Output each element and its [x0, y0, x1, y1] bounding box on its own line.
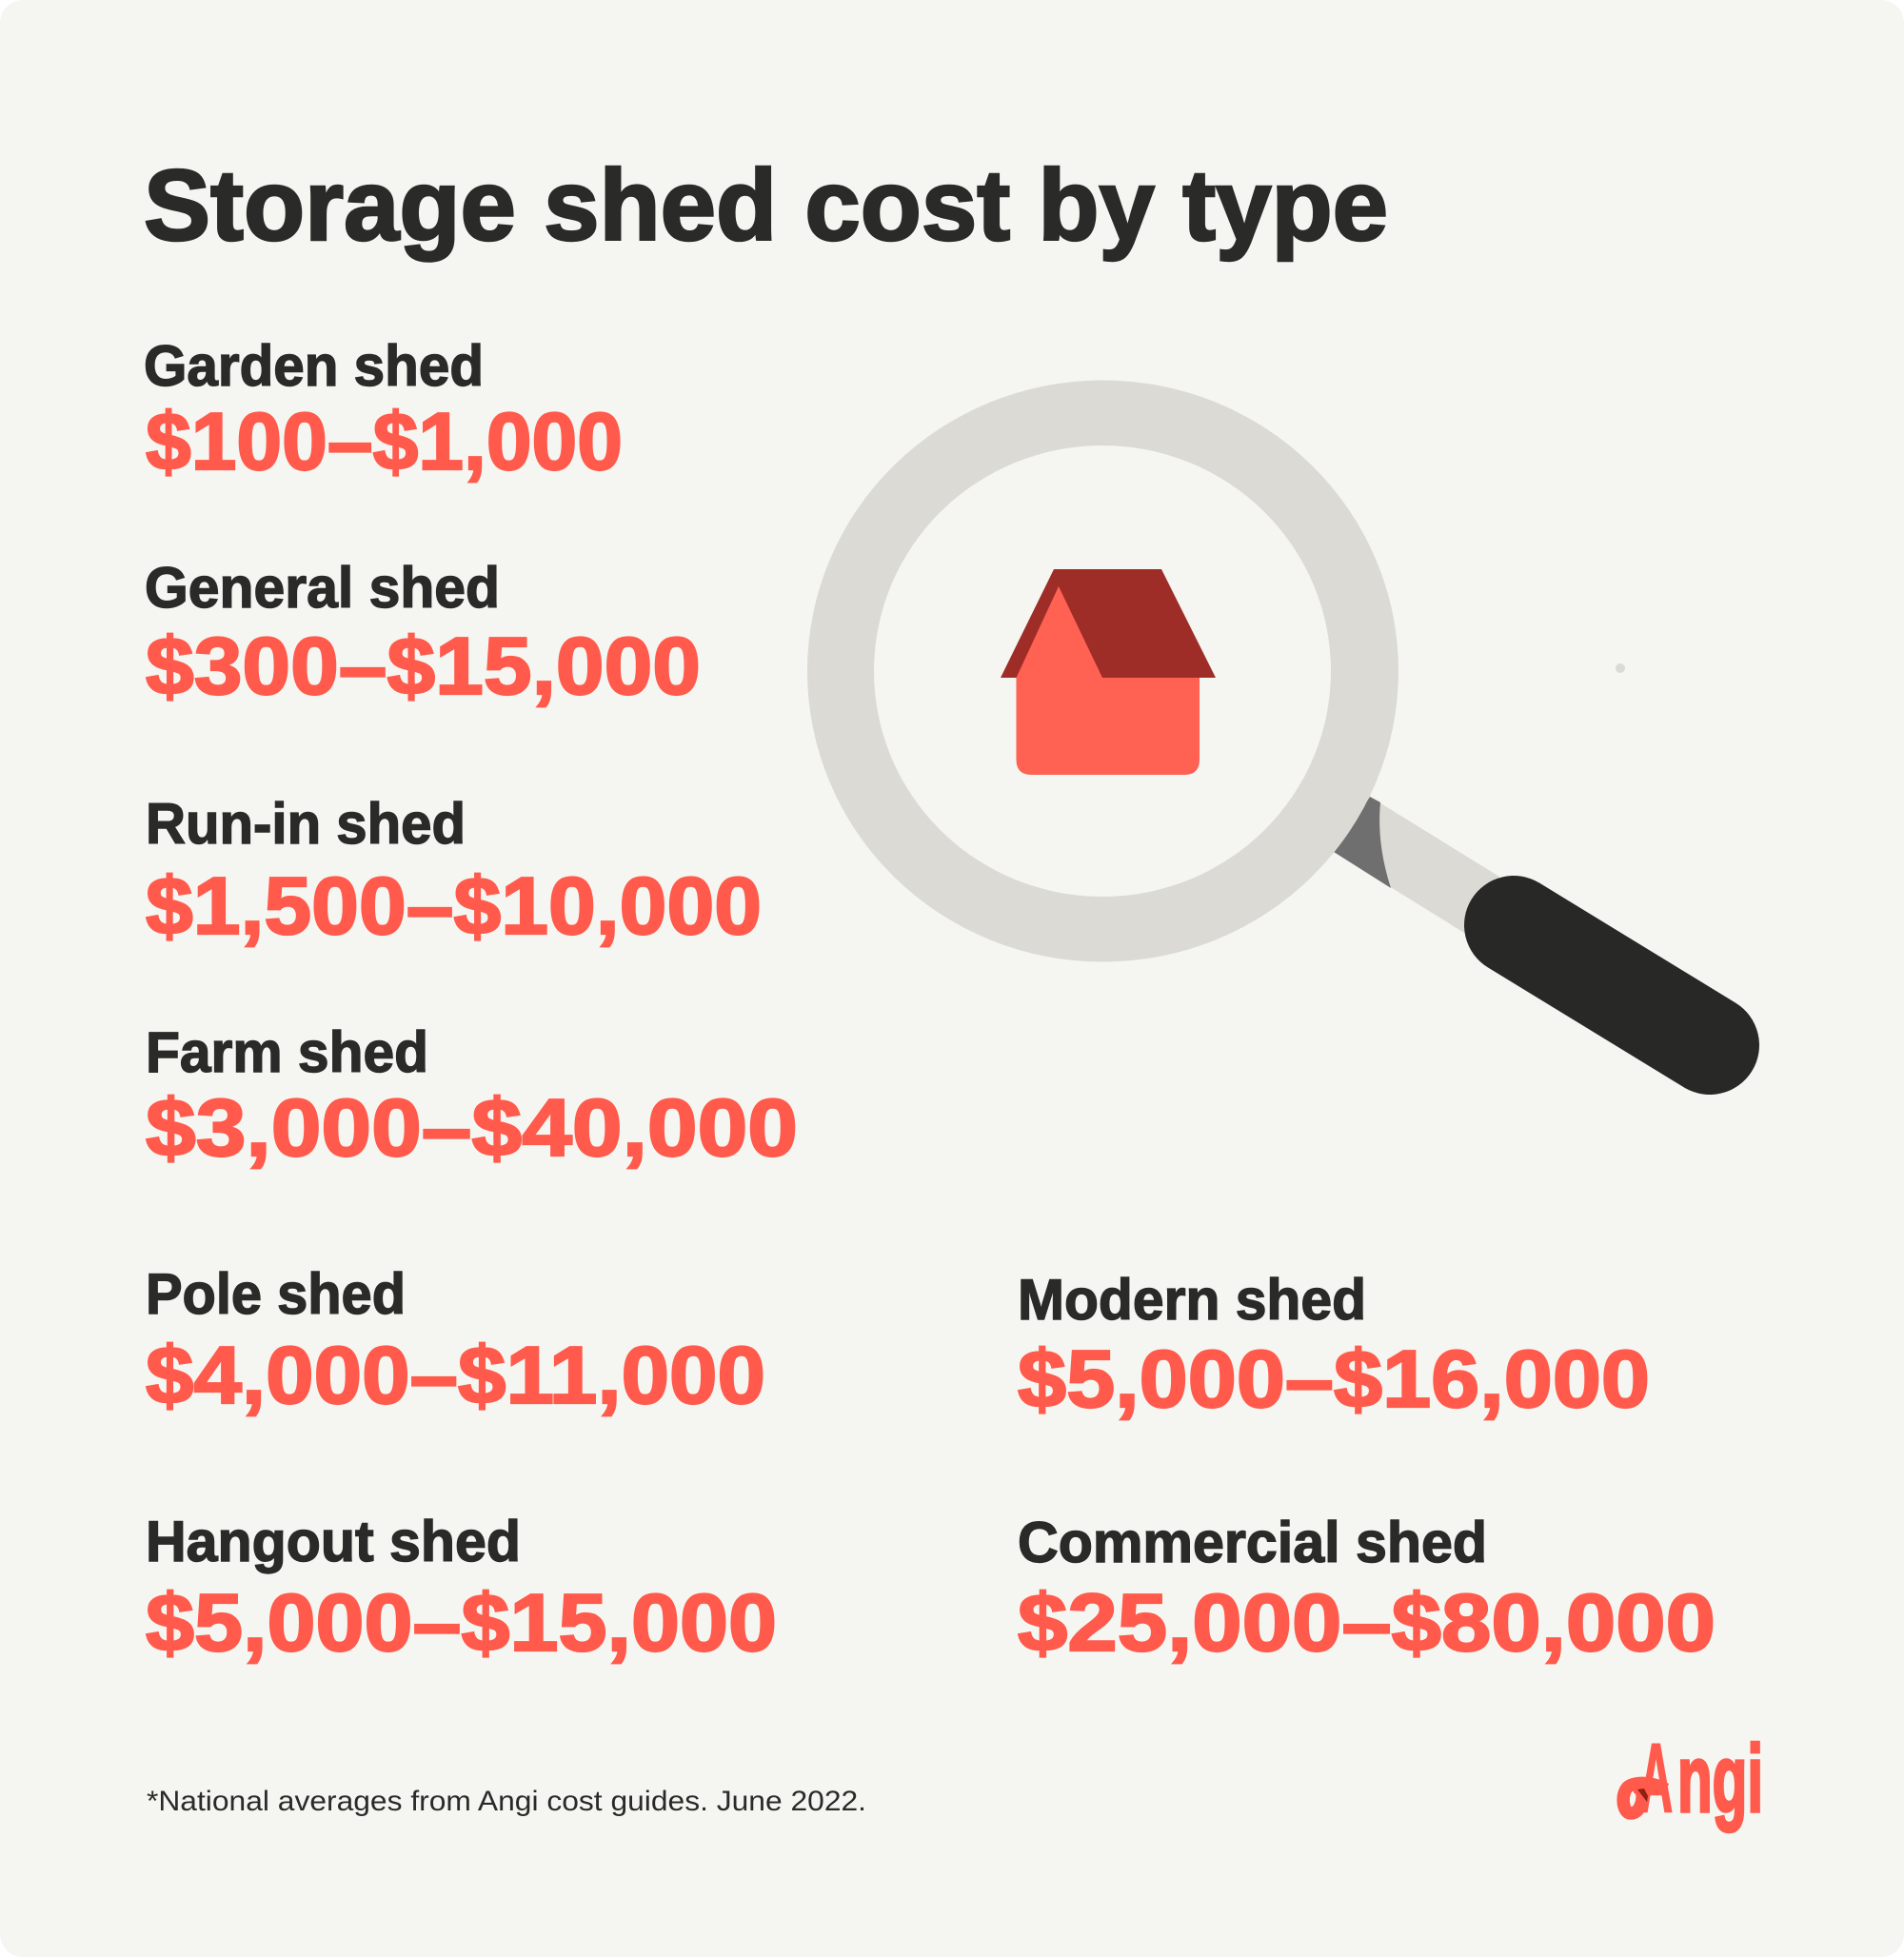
- logo: Angi: A: [1639, 1724, 1673, 1832]
- label: commercial shed: Commercial shed: [1018, 1511, 1487, 1574]
- label: modern shed: Modern shed: [1018, 1268, 1366, 1332]
- logo swash fold: [1637, 1789, 1648, 1802]
- price: general shed: $300–$15,000: [146, 622, 701, 712]
- magnifier handle: [1514, 925, 1710, 1045]
- panel: garden shed cost: [144, 334, 623, 487]
- panel: pole shed cost: [146, 1262, 765, 1421]
- panel: run-in shed cost: [146, 792, 762, 952]
- magnifier shaft shadow: [1334, 797, 1391, 888]
- logo: Angi: [1623, 1724, 1763, 1832]
- price: farm shed: $3,000–$40,000: [146, 1083, 798, 1174]
- panel: commercial shed cost: [1018, 1511, 1716, 1669]
- logo swash loop: [1623, 1783, 1666, 1813]
- price: commercial shed: $25,000–$80,000: [1018, 1578, 1716, 1669]
- label: farm shed: Farm shed: [146, 1020, 428, 1084]
- magnifier shaft: [1334, 797, 1499, 933]
- price: hangout shed: $5,000–$15,000: [146, 1578, 777, 1669]
- icon: shed roof: [1001, 569, 1216, 678]
- label: general shed: General shed: [145, 556, 500, 620]
- icon: shed body: [1017, 586, 1200, 775]
- title: Storage shed cost by type: [144, 149, 1388, 262]
- decorative dot: [1616, 663, 1625, 673]
- icon: magnifying glass with shed: [807, 381, 1710, 1045]
- label: pole shed: Pole shed: [146, 1262, 406, 1326]
- panel: hangout shed cost: [146, 1510, 777, 1669]
- panel: general shed cost: [145, 556, 701, 712]
- magnifier ring: [807, 381, 1398, 961]
- logo letters ngi: ngi: [1677, 1726, 1763, 1832]
- price: modern shed: $5,000–$16,000: [1018, 1334, 1650, 1425]
- label: garden shed: Garden shed: [144, 334, 484, 398]
- panel: farm shed cost: [146, 1020, 798, 1174]
- label: run-in shed: Run-in shed: [146, 792, 466, 856]
- footnote: *National averages from Angi cost guides. June 2022.: [147, 1786, 866, 1817]
- label: hangout shed: Hangout shed: [146, 1510, 521, 1573]
- price: garden shed: $100–$1,000: [146, 397, 623, 487]
- panel: modern shed cost: [1018, 1268, 1650, 1425]
- price: run-in shed: $1,500–$10,000: [146, 861, 762, 952]
- price: pole shed: $4,000–$11,000: [146, 1331, 765, 1421]
